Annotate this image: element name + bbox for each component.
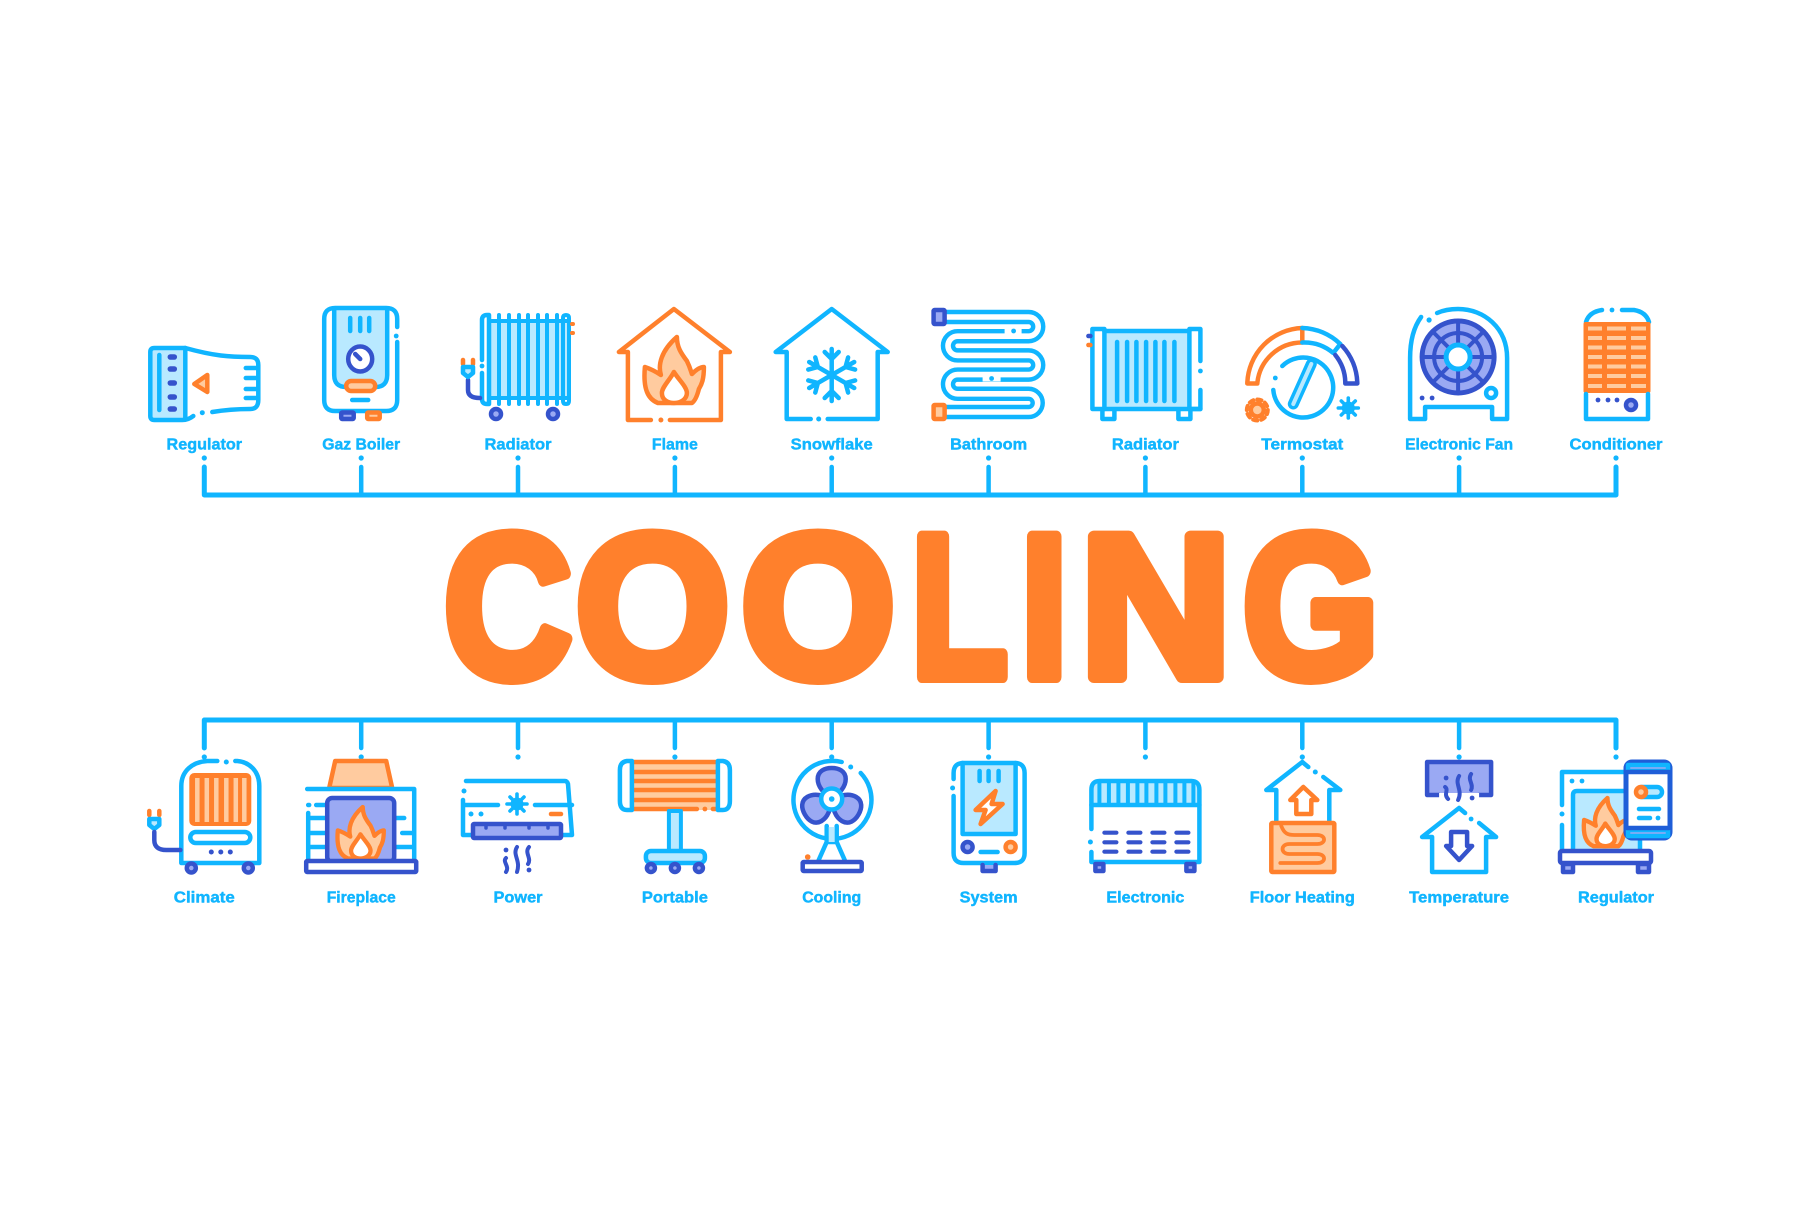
label: Climate: Climate: [174, 890, 235, 906]
connector: top bracket: [202, 455, 1619, 495]
label: Power: Power: [494, 890, 542, 906]
icon: gas boiler: [324, 308, 399, 419]
icon: fireplace: [306, 761, 416, 872]
icon: conditioner: [1584, 308, 1650, 419]
icon: panel radiator: [1088, 329, 1203, 419]
icon: oil radiator: [463, 315, 573, 419]
label: Flame: Flame: [652, 436, 698, 454]
label: Bathroom: Bathroom: [950, 436, 1027, 454]
icon: regulator: [150, 348, 258, 420]
icon: temperature house: [1422, 762, 1496, 872]
label: Radiator: Radiator: [1112, 436, 1179, 454]
title: O: [575, 493, 730, 721]
icon: towel radiator: [934, 310, 1038, 419]
label: Cooling: Cooling: [802, 890, 861, 906]
title: C: [444, 493, 572, 721]
icon: floor heating: [1266, 762, 1340, 872]
title: O: [741, 493, 895, 721]
icon: thermostat: [1247, 328, 1358, 420]
icon: portable heater: [620, 761, 730, 872]
icon: climate heater: [149, 760, 259, 872]
icon: smart fireplace regulator: [1560, 762, 1670, 872]
label: Portable: Portable: [642, 890, 708, 906]
label: Regulator: Regulator: [1578, 890, 1654, 906]
label: Electronic: Electronic: [1106, 890, 1185, 906]
label: Floor Heating: Floor Heating: [1250, 890, 1355, 906]
label: Gaz Boiler: Gaz Boiler: [322, 436, 400, 454]
icon: snowflake house: [776, 309, 888, 422]
icon: air conditioner: [462, 781, 572, 872]
label: Termostat: Termostat: [1261, 436, 1344, 454]
title: I: [1021, 493, 1068, 721]
title: N: [1080, 493, 1232, 721]
label: Electronic Fan: Electronic Fan: [1405, 436, 1513, 454]
connector: bottom bracket: [202, 720, 1619, 760]
label: Temperature: Temperature: [1409, 890, 1509, 906]
icon: electronic fan: [1410, 309, 1507, 419]
label: System: System: [960, 890, 1018, 906]
label: Radiator: Radiator: [484, 436, 552, 454]
label: Conditioner: Conditioner: [1570, 436, 1662, 454]
icon: electric system: [950, 763, 1025, 871]
icon: table fan: [793, 761, 871, 871]
title: L: [911, 493, 1008, 721]
title: G: [1243, 493, 1379, 721]
label: Fireplace: Fireplace: [327, 890, 396, 906]
icon: electronic convector: [1088, 781, 1199, 871]
icon: flame house: [619, 309, 730, 422]
label: Regulator: Regulator: [167, 436, 242, 454]
label: Snowflake: Snowflake: [791, 436, 873, 454]
